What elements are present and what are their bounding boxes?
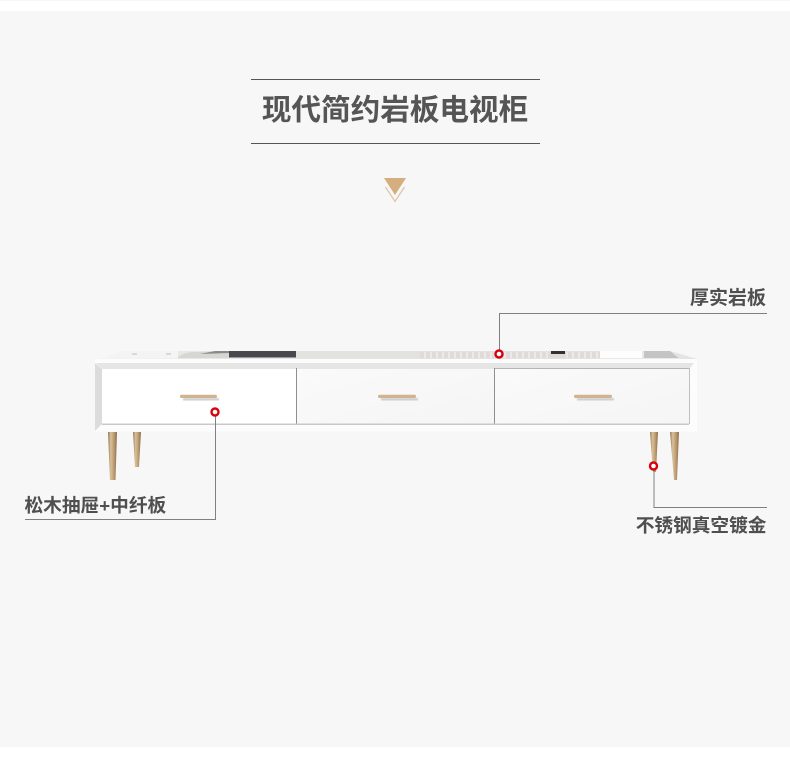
bottom white band <box>0 747 790 757</box>
callout: drawer material <box>24 408 218 520</box>
icon: double down triangle <box>384 178 406 202</box>
callout: drawer material: 松木抽屉+中纤板 <box>24 495 167 516</box>
callout: stainless legs: 不锈钢真空镀金 <box>636 515 767 536</box>
slab front shade <box>96 363 694 369</box>
drawer seams <box>102 368 690 425</box>
left drawer <box>102 369 296 424</box>
callout: thick slab: 厚实岩板 <box>690 286 766 309</box>
callout: thick slab <box>496 286 767 358</box>
right drawer <box>495 369 689 424</box>
title block: 现代简约岩板电视柜 <box>262 94 528 127</box>
middle drawer <box>297 369 494 424</box>
left inner bevel <box>95 363 102 431</box>
product: TV cabinet <box>95 351 697 480</box>
callout: stainless legs <box>636 462 767 536</box>
slab top surface <box>100 351 697 359</box>
cabinet legs <box>108 432 679 480</box>
cabinet body <box>95 359 697 432</box>
top white band <box>0 1 790 11</box>
